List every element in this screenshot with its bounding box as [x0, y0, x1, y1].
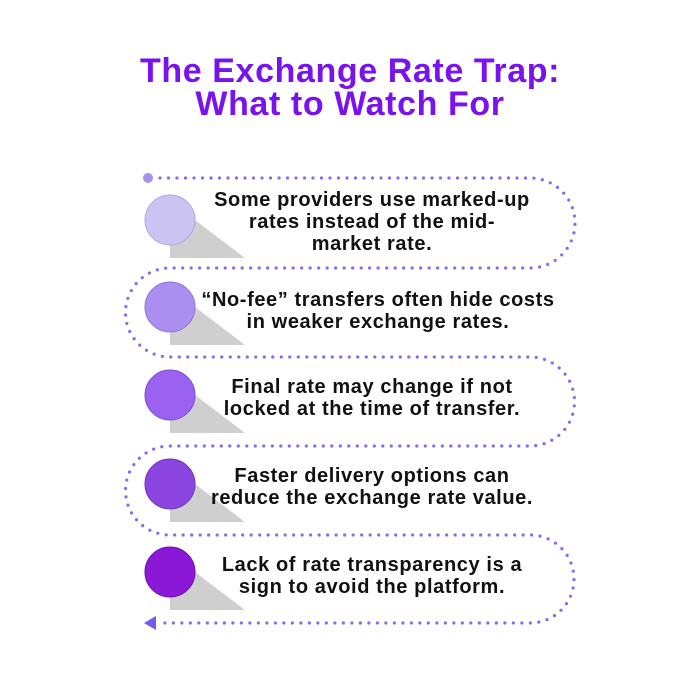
text 4 [211, 465, 533, 509]
text 1: Some providers use marked-up [214, 189, 530, 211]
title: What to Watch For [195, 85, 505, 123]
text 4: reduce the exchange rate value. [211, 487, 533, 509]
text 1: rates instead of the mid- [249, 211, 495, 233]
text 3: locked at the time of transfer. [224, 398, 520, 420]
circle icons with shadows [145, 195, 245, 610]
text 4: Faster delivery options can [234, 465, 510, 487]
text 3 [224, 376, 520, 420]
title: The Exchange Rate Trap: [140, 52, 560, 90]
text 5 [222, 554, 522, 598]
text 2: in weaker exchange rates. [247, 311, 509, 333]
dotted snake path [126, 173, 575, 630]
text 5: Lack of rate transparency is a [222, 554, 522, 576]
text 1: market rate. [312, 233, 432, 255]
title [140, 52, 560, 123]
text 1 [214, 189, 530, 255]
text 2: “No-fee” transfers often hide costs [201, 289, 555, 311]
text 5: sign to avoid the platform. [239, 576, 505, 598]
text 2 [201, 289, 555, 333]
text 3: Final rate may change if not [231, 376, 513, 398]
